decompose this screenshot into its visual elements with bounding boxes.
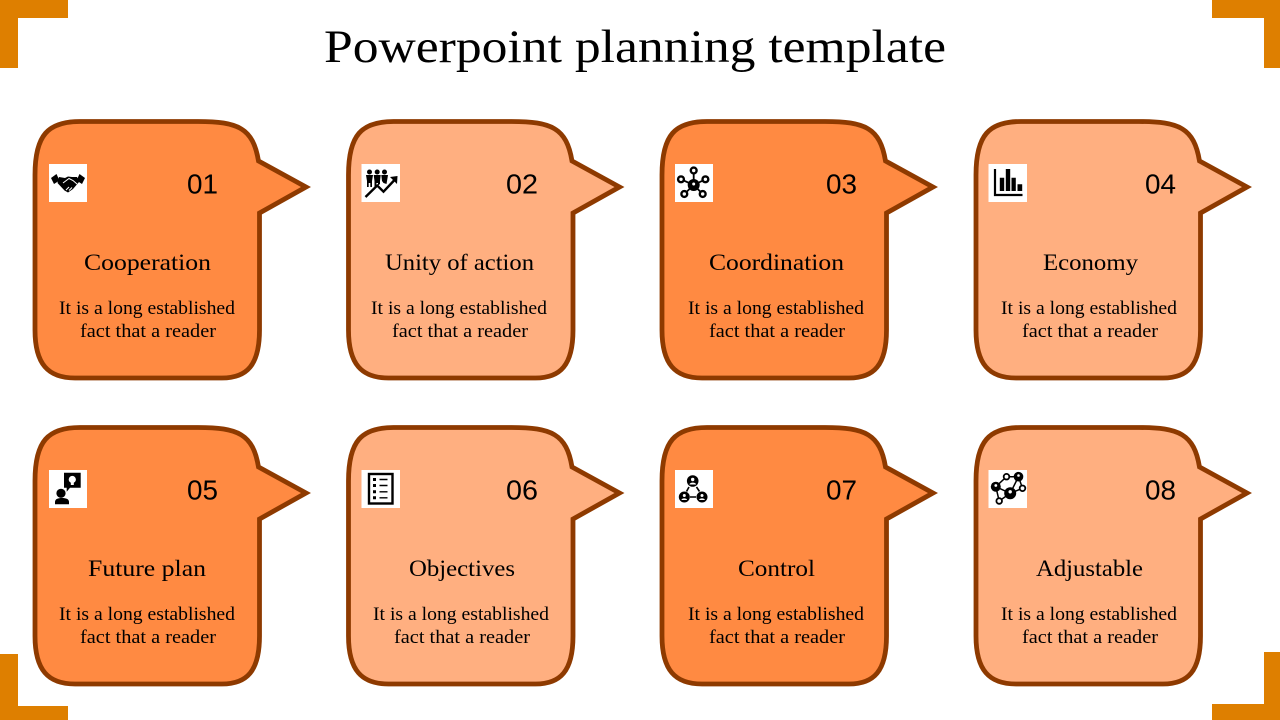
number: 05 bbox=[187, 474, 218, 506]
panel: 07 Control bbox=[662, 428, 933, 684]
corner bracket: top left bbox=[0, 0, 68, 68]
body text bbox=[1001, 605, 1178, 648]
heading: Objectives bbox=[409, 556, 515, 581]
body text: It is a long established bbox=[59, 605, 236, 625]
number: 03 bbox=[826, 168, 857, 200]
body text: fact that a reader bbox=[392, 322, 528, 342]
panel: 01 Cooperation bbox=[35, 122, 306, 378]
number: 06 bbox=[506, 474, 538, 506]
body text bbox=[59, 605, 236, 648]
body text: fact that a reader bbox=[709, 322, 845, 342]
body text: fact that a reader bbox=[709, 628, 845, 648]
icon: hub network bbox=[675, 164, 713, 202]
panel: 02 Unity of action bbox=[348, 122, 620, 378]
title: Powerpoint planning template bbox=[324, 21, 946, 73]
body text: It is a long established bbox=[688, 605, 865, 625]
corner bracket: top right bbox=[1212, 0, 1280, 68]
icon: three connected people bbox=[675, 470, 713, 508]
panel: 04 Economy bbox=[976, 122, 1247, 378]
body text: It is a long established bbox=[371, 299, 548, 319]
corner bracket: bottom right bbox=[1212, 652, 1280, 720]
body text: It is a long established bbox=[373, 605, 550, 625]
speech bubble bbox=[662, 428, 933, 684]
body text: It is a long established bbox=[59, 299, 236, 319]
heading: Control bbox=[738, 556, 815, 581]
body text: fact that a reader bbox=[1022, 322, 1158, 342]
panel: 03 Coordination bbox=[662, 122, 933, 378]
heading: Future plan bbox=[88, 556, 207, 581]
heading: Adjustable bbox=[1036, 556, 1143, 581]
heading: Cooperation bbox=[84, 250, 212, 275]
body text bbox=[1001, 299, 1178, 342]
body text bbox=[59, 299, 236, 342]
body text bbox=[373, 605, 550, 648]
panel: 05 Future plan bbox=[35, 428, 306, 684]
heading: Coordination bbox=[709, 250, 845, 275]
number: 08 bbox=[1145, 474, 1176, 506]
body text bbox=[688, 299, 865, 342]
speech bubble bbox=[35, 122, 306, 378]
body text bbox=[688, 605, 865, 648]
body text: fact that a reader bbox=[394, 628, 530, 648]
speech bubble bbox=[976, 122, 1247, 378]
body text: It is a long established bbox=[1001, 299, 1178, 319]
panel: 08 Adjustable bbox=[976, 428, 1247, 684]
body text: fact that a reader bbox=[80, 628, 216, 648]
speech bubble bbox=[35, 428, 306, 684]
speech bubble bbox=[976, 428, 1247, 684]
speech bubble bbox=[662, 122, 933, 378]
speech bubble bbox=[348, 122, 620, 378]
icon: person with idea bubble bbox=[49, 470, 87, 508]
panel: 06 Objectives bbox=[348, 428, 620, 684]
corner bracket: bottom left bbox=[0, 654, 68, 720]
body text bbox=[371, 299, 548, 342]
icon: team growth arrow bbox=[362, 164, 400, 202]
body text: It is a long established bbox=[1001, 605, 1178, 625]
icon: people network bbox=[988, 470, 1027, 508]
speech bubble bbox=[348, 428, 620, 684]
icon: checklist bbox=[362, 470, 400, 508]
body text: fact that a reader bbox=[1022, 628, 1158, 648]
heading: Unity of action bbox=[385, 250, 535, 275]
icon: bar chart bbox=[988, 164, 1027, 202]
number: 02 bbox=[506, 168, 538, 200]
number: 07 bbox=[826, 474, 857, 506]
heading: Economy bbox=[1043, 250, 1139, 275]
number: 01 bbox=[187, 168, 218, 200]
icon: handshake bbox=[49, 164, 87, 202]
number: 04 bbox=[1145, 168, 1176, 200]
body text: fact that a reader bbox=[80, 322, 216, 342]
body text: It is a long established bbox=[688, 299, 865, 319]
